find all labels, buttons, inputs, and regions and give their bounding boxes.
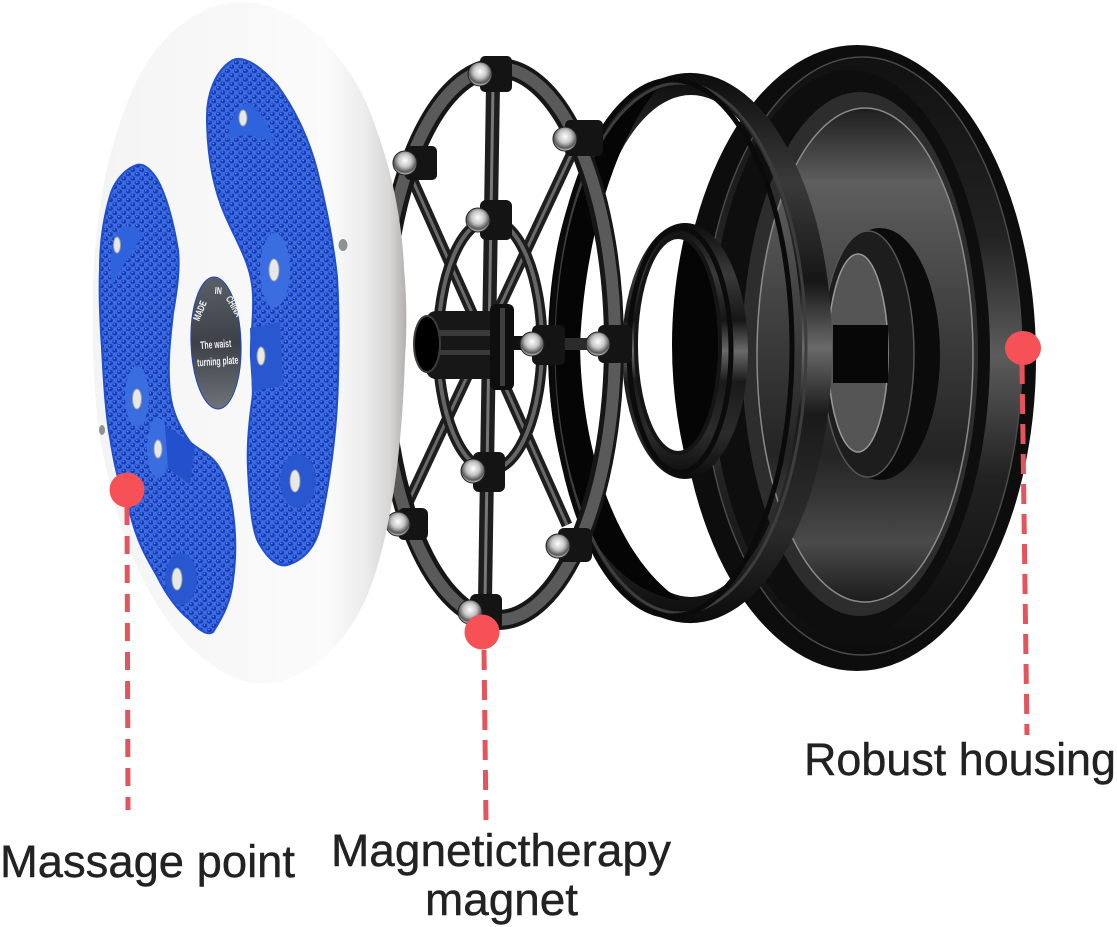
frame hub (414, 304, 530, 390)
inner frame ring (438, 220, 542, 470)
frame spokes (398, 85, 604, 600)
housing hub (820, 228, 940, 480)
right foot pad (207, 59, 339, 565)
large black ring (548, 73, 832, 623)
rim screws (99, 239, 348, 435)
magnet frame (381, 56, 632, 630)
raised magnets (111, 103, 316, 605)
left foot pad (100, 165, 235, 633)
label: magnetic therapy magnet: magnet (425, 874, 578, 925)
label: massage point: Massage point (0, 836, 295, 887)
robust housing (678, 45, 1036, 671)
center badge: turning plate (197, 354, 239, 369)
center badge (189, 276, 245, 410)
center badge: IN (214, 284, 222, 297)
callout: magnet marker (464, 614, 500, 822)
center badge: The waist (200, 337, 232, 351)
small ring (622, 223, 748, 479)
magnet balls (386, 56, 632, 630)
center badge: CHINA (223, 294, 245, 319)
label: robust housing: Robust housing (804, 734, 1116, 785)
callout: massage point marker (110, 472, 144, 810)
callout: housing marker (1005, 331, 1041, 735)
label: magnetic therapy magnet (331, 825, 671, 925)
label: magnetic therapy magnet: Magnetictherapy (331, 825, 671, 876)
center badge: MADE (191, 299, 209, 322)
massage disc (93, 2, 406, 683)
outer frame ring (382, 68, 614, 620)
